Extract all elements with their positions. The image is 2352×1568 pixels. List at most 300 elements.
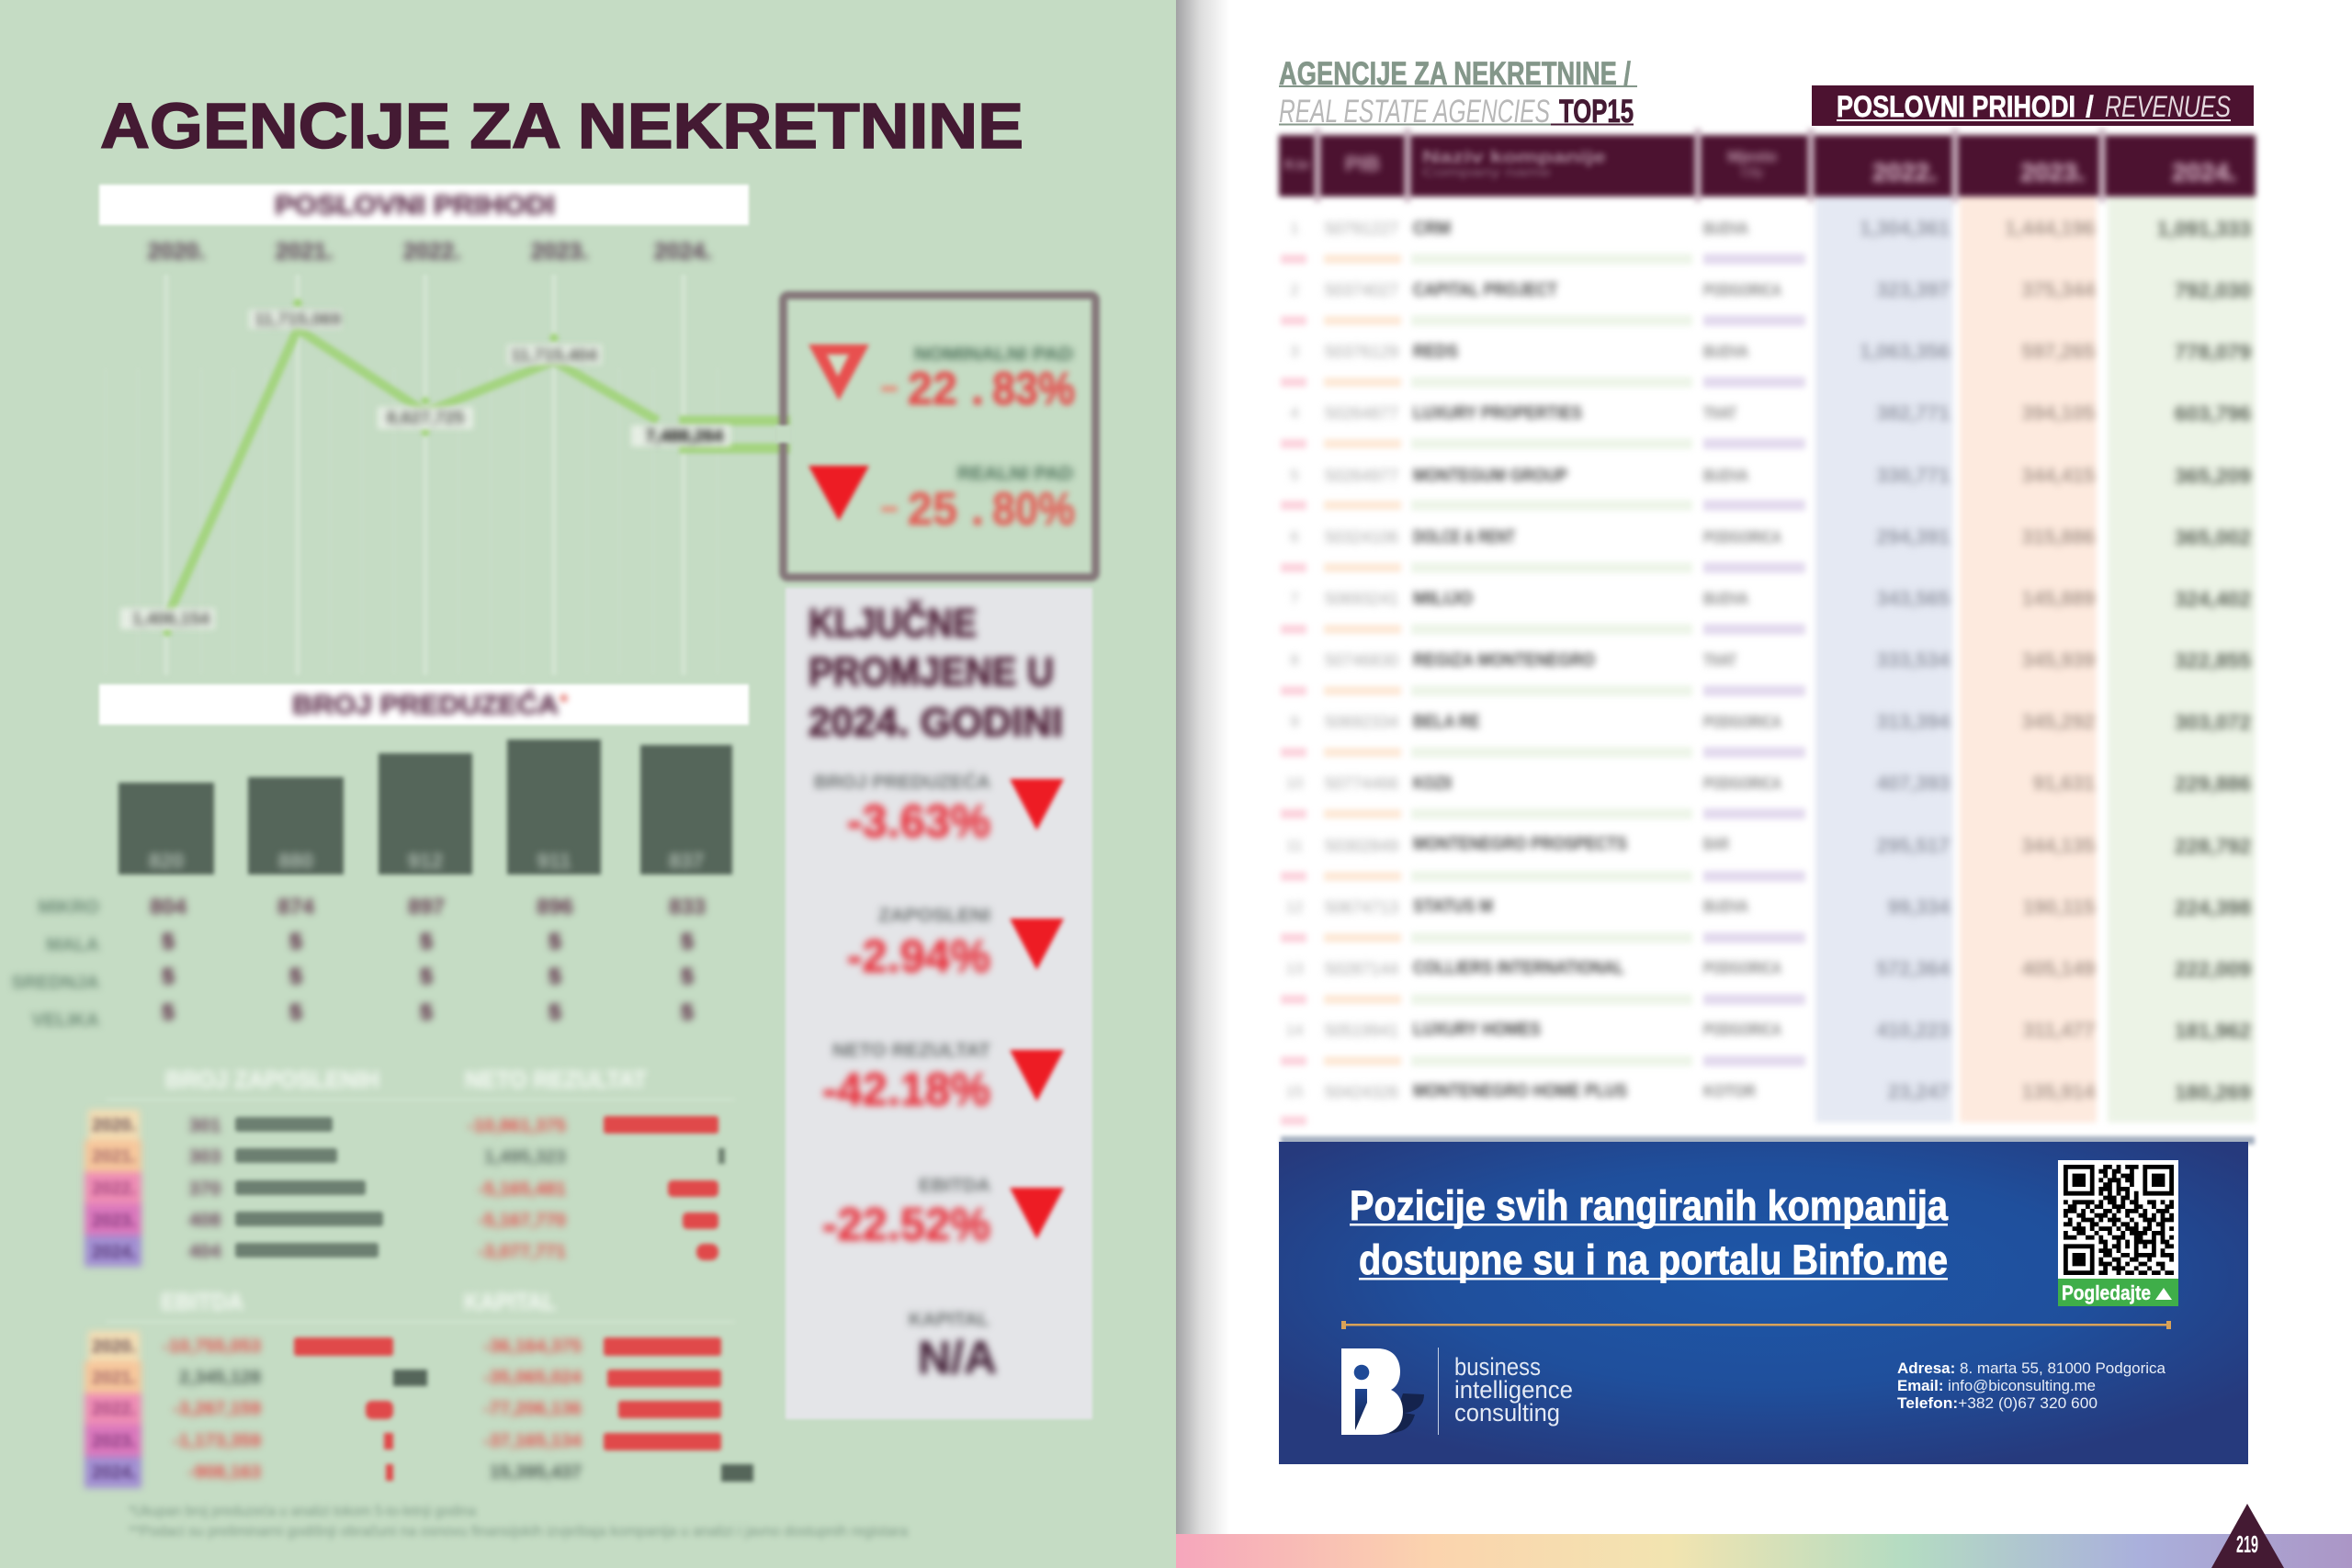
row 6: 365,002 — [2175, 525, 2251, 549]
row 12: BUDVA — [1703, 897, 1748, 916]
footnotes — [129, 1504, 908, 1540]
row 7: 145,889 — [2021, 587, 2095, 610]
row 10: 407,393 — [1876, 772, 1950, 795]
row 14: PODGORICA — [1703, 1021, 1781, 1039]
row 11 — [1286, 834, 2251, 858]
tab label: revenues: REVENUES — [2105, 90, 2231, 123]
row 7: 50693241 — [1325, 590, 1398, 608]
year axis labels: 2021. — [276, 239, 333, 265]
row 14 — [1286, 1019, 2251, 1043]
size category values: 5 — [162, 1000, 175, 1025]
ad headline — [1350, 1182, 1949, 1283]
ebitda bars: 2,345,128 — [179, 1368, 261, 1388]
row 7: MILIJO — [1413, 589, 1473, 609]
row 11: 295,517 — [1876, 834, 1950, 857]
row 5: 344,415 — [2021, 464, 2095, 487]
size category values: 5 — [420, 964, 433, 989]
net result bars — [468, 1116, 725, 1262]
row 4: TIVAT — [1703, 404, 1736, 423]
year axis labels: 2023. — [531, 239, 588, 265]
section headings: KAPITAL — [464, 1288, 556, 1315]
heading: ključne promjene: PROMJENE U — [808, 649, 1054, 694]
row 1: 50791227 — [1325, 220, 1398, 238]
size category values: 5 — [548, 930, 561, 954]
chart grid lines — [106, 275, 718, 675]
row 1: BUDVA — [1703, 220, 1748, 238]
section headings: EBITDA — [161, 1288, 243, 1315]
bar chart: companies per year: 911 — [537, 849, 571, 873]
row 8: 345,939 — [2021, 649, 2095, 671]
row 2: CAPITAL PROJECT — [1413, 280, 1557, 300]
page gutter shadow — [1176, 0, 1229, 1534]
size category values: 896 — [537, 895, 573, 919]
year badges: 2020. — [92, 1337, 136, 1357]
panel: key changes in 2024 — [786, 588, 1092, 1419]
row 2: PODGORICA — [1703, 281, 1781, 299]
tab slash: / — [2086, 90, 2094, 123]
metric: ebitda — [822, 1176, 990, 1250]
size category values: 5 — [548, 1000, 561, 1025]
row 3 — [1290, 340, 2251, 364]
size category labels: MIKRO — [38, 897, 99, 918]
capital bars: -35,065,024 — [483, 1368, 582, 1388]
row 1: 1,444,196 — [2005, 217, 2095, 240]
metric: kapital — [909, 1310, 997, 1383]
capital bars: -37,165,134 — [483, 1431, 582, 1451]
metric: neto rezultat — [822, 1041, 990, 1115]
row 6: PODGORICA — [1703, 528, 1781, 547]
row 8 — [1290, 649, 2251, 672]
row 15: 135,914 — [2021, 1080, 2096, 1103]
label: realni pad: REALNI PAD — [957, 464, 1073, 484]
value: real change: 25 — [908, 483, 957, 535]
bar chart: companies per year: 880 — [278, 849, 313, 873]
size category values: 804 — [150, 895, 187, 919]
subheading: top 15: TOP15 — [1559, 94, 1634, 130]
row 15: 180,269 — [2175, 1080, 2251, 1104]
row 11: 228,792 — [2175, 834, 2251, 858]
row 12 — [1286, 896, 2251, 919]
row 8: 8 — [1290, 651, 1299, 669]
logo wordmark — [1454, 1353, 1573, 1427]
year badges: 2021. — [92, 1147, 136, 1167]
employees bars: 301 — [188, 1115, 221, 1136]
row 4: 382,771 — [1876, 401, 1950, 424]
contact details: Email: info@biconsulting.me — [1897, 1377, 2096, 1394]
table: header row: PIB — [1345, 152, 1380, 175]
row 5: 365,209 — [2175, 464, 2251, 488]
year badges — [85, 1110, 141, 1267]
row 14: 311,477 — [2023, 1019, 2095, 1042]
size category labels: SREDNJA — [11, 973, 99, 993]
heading: ključne promjene: 2024. GODINI — [808, 700, 1063, 745]
row 7: 324,402 — [2175, 587, 2251, 611]
row 13: 405,149 — [2021, 957, 2095, 980]
panel: revenue line chart — [99, 185, 790, 675]
row 10: 10 — [1286, 774, 1303, 792]
value: nominal change — [880, 363, 1075, 414]
row 11: 11 — [1286, 837, 1303, 854]
size category values: 5 — [681, 964, 694, 989]
year axis labels — [148, 239, 711, 265]
page number marker — [2211, 1504, 2284, 1568]
heading banner: poslovni prihodi — [99, 185, 749, 225]
icon: down arrow — [1010, 919, 1064, 970]
row 10: 91,631 — [2033, 772, 2095, 795]
section headings: BROJ ZAPOSLENIH — [165, 1066, 379, 1093]
row 4: 394,105 — [2021, 401, 2095, 424]
panel: employees and net result — [85, 1066, 735, 1267]
row 1: 1,304,361 — [1860, 217, 1950, 240]
row 1: 1 — [1290, 220, 1299, 237]
row 5: 5 — [1290, 467, 1299, 484]
row 7: BUDVA — [1703, 590, 1748, 608]
section headings — [161, 1288, 556, 1315]
year badges: 2023. — [92, 1432, 136, 1451]
chart data labels: 7,488,264 — [646, 427, 724, 446]
value: real change: . — [971, 483, 984, 535]
row 13: 572,364 — [1876, 957, 1951, 980]
row 8: 333,534 — [1876, 649, 1951, 671]
metric: broj preduzeća — [814, 771, 990, 847]
bar chart: companies per year: 820 — [149, 849, 184, 873]
row 12: 190,115 — [2023, 896, 2095, 919]
chart data labels: 8,627,725 — [387, 409, 465, 428]
row 3: 1,063,356 — [1860, 340, 1950, 363]
year badges: 2023. — [92, 1212, 136, 1231]
row 3: 597,265 — [2021, 340, 2095, 363]
capital bars: -77,206,136 — [483, 1399, 582, 1419]
row 15: 23,247 — [1888, 1080, 1950, 1103]
section heading rule — [106, 1099, 735, 1100]
row 4 — [1290, 401, 2251, 425]
bar chart: companies per year: 837 — [669, 849, 704, 873]
row 3: BUDVA — [1703, 343, 1748, 361]
row 14: LUXURY HOMES — [1413, 1020, 1541, 1040]
row 10: KOZII — [1413, 773, 1452, 794]
year badges — [85, 1331, 141, 1488]
orange divider — [1341, 1321, 2171, 1329]
box outline — [783, 296, 1095, 577]
QR call to action: Pogledajte — [2062, 1281, 2151, 1304]
size category labels — [11, 897, 99, 1031]
section heading rule — [106, 1321, 735, 1323]
year axis labels: 2024. — [654, 239, 711, 265]
row 10: PODGORICA — [1703, 774, 1781, 793]
table: row separators — [1281, 259, 1805, 1121]
icon: outlined down triangle — [808, 344, 869, 400]
size category values: 5 — [420, 1000, 433, 1025]
row 6: 6 — [1290, 528, 1299, 546]
row 8: TIVAT — [1703, 651, 1736, 670]
row 13: 13 — [1286, 960, 1303, 977]
row 12: STATUS M — [1413, 897, 1493, 917]
row 5: 330,771 — [1876, 464, 1950, 487]
row 11: 344,135 — [2021, 834, 2095, 857]
contact details: Telefon:+382 (0)67 320 600 — [1897, 1394, 2098, 1412]
row 4: LUXURY PROPERTIES — [1413, 403, 1582, 423]
metric: ebitda: -22.52% — [822, 1199, 990, 1250]
row 9: 9 — [1290, 713, 1299, 730]
heading banner: broj preduzeća: * — [560, 690, 569, 715]
panel: ebitda and capital — [85, 1288, 753, 1488]
row 11: BAR — [1703, 835, 1729, 853]
bottom gradient strip — [1176, 1534, 2352, 1568]
label: nominalni pad: NOMINALNI PAD — [914, 344, 1073, 365]
size category values: 897 — [408, 895, 445, 919]
row 15: MONTENEGRO HOME PLUS — [1413, 1081, 1627, 1101]
year badges: 2022. — [92, 1400, 136, 1419]
row 8: 50746830 — [1325, 651, 1398, 670]
box opening for chart lines — [775, 425, 792, 443]
value: nominal change: 83% — [992, 363, 1075, 414]
table: header row: City — [1741, 164, 1763, 179]
logo wordmark: consulting — [1454, 1399, 1560, 1427]
table: header row: Company name — [1422, 164, 1551, 179]
row 6 — [1290, 525, 2251, 549]
chart data points — [163, 299, 559, 637]
row 3: 3 — [1290, 343, 1299, 360]
size category values: 874 — [277, 895, 315, 919]
employees bars: 408 — [188, 1210, 221, 1231]
row 14: 410,223 — [1876, 1019, 1950, 1042]
left page background — [0, 0, 1176, 1568]
row 9: 50692334 — [1325, 713, 1398, 731]
row 15: KOTOR — [1703, 1082, 1756, 1100]
metric: broj preduzeća: -3.63% — [847, 795, 990, 847]
panel: revenue change box — [775, 296, 1095, 577]
heading: ključne promjene — [808, 599, 1063, 745]
row 7: 343,565 — [1876, 587, 1950, 610]
year badges: 2022. — [92, 1179, 136, 1199]
ebitda bars: -1,173,359 — [173, 1431, 261, 1451]
chart data labels: 11,715,069 — [254, 310, 341, 330]
footnotes: *Ukupan broj preduzeća u analizi tokom 5-to-letnji godina — [129, 1504, 476, 1519]
row 11: MONTENEGRO PROSPECTS — [1413, 834, 1627, 854]
tab underline — [1837, 119, 2231, 121]
page number marker: 219 — [2236, 1530, 2258, 1558]
net result bars: -10,861,375 — [468, 1116, 566, 1136]
row 5: BUDVA — [1703, 467, 1748, 485]
row 13: 50287144 — [1325, 960, 1398, 978]
metric: neto rezultat: -42.18% — [822, 1064, 990, 1115]
row 3: 778,079 — [2175, 340, 2251, 364]
bar chart: companies per year: 912 — [408, 849, 443, 873]
row 6: DOLCE & RENT — [1413, 527, 1515, 547]
value: real change: 80% — [992, 483, 1075, 535]
net result bars: -5,167,770 — [478, 1211, 566, 1231]
row 6: 294,391 — [1876, 525, 1950, 548]
table: header row — [1279, 129, 2256, 202]
year badges: 2024. — [92, 1463, 136, 1483]
bar chart: companies per year — [119, 739, 732, 874]
value: nominal change: . — [971, 363, 984, 414]
row 6: 315,886 — [2021, 525, 2095, 548]
row 3: REDS — [1413, 342, 1458, 362]
table: header row: 2022. — [1872, 158, 1937, 186]
row 7: 7 — [1290, 590, 1299, 607]
row 2: 375,344 — [2021, 278, 2096, 301]
chart data labels: 11,715,404 — [511, 346, 597, 366]
employees bars: 370 — [188, 1179, 221, 1200]
year axis labels: 2020. — [148, 239, 205, 265]
row 12: 224,398 — [2175, 896, 2251, 919]
metric: kapital: N/A — [918, 1332, 997, 1383]
right page background — [1176, 0, 2352, 1568]
size category values: 5 — [289, 1000, 302, 1025]
size category values: 5 — [420, 930, 433, 954]
row 14: 181,962 — [2175, 1019, 2251, 1043]
metric: neto rezultat: NETO REZULTAT — [832, 1041, 990, 1061]
employees bars — [188, 1115, 383, 1262]
year badges: 2024. — [92, 1243, 136, 1262]
row 15: 50424326 — [1325, 1083, 1398, 1101]
row 1: CRM — [1413, 219, 1451, 239]
row 5 — [1290, 464, 2251, 488]
row 13: PODGORICA — [1703, 959, 1781, 977]
row 15: 15 — [1286, 1083, 1303, 1100]
panel: portal advertisement — [1279, 1142, 2248, 1464]
row 4: 4 — [1290, 404, 1299, 422]
heading banner: broj preduzeća — [99, 684, 749, 725]
row 13: COLLIERS INTERNATIONAL — [1413, 958, 1624, 978]
table: header row: Naziv kompanije — [1422, 148, 1606, 166]
row 11: 50302849 — [1325, 837, 1398, 855]
row 9: 313,394 — [1876, 710, 1951, 733]
row 9 — [1290, 710, 2251, 734]
capital bars — [483, 1337, 753, 1483]
value: real change — [880, 483, 1075, 535]
table: header row: Mjesto — [1727, 148, 1777, 165]
tab label: poslovni prihodi: POSLOVNI PRIHODI — [1837, 90, 2075, 123]
capital bars: -36,164,375 — [483, 1337, 582, 1357]
heading banner: poslovni prihodi: POSLOVNI PRIHODI — [275, 191, 555, 220]
row 8: REGIZA MONTENEGRO — [1413, 650, 1595, 671]
table: column tints — [1815, 193, 2256, 1122]
table bottom shadow — [1281, 1136, 2255, 1145]
row 13 — [1286, 957, 2251, 981]
row 4: 50264877 — [1325, 404, 1398, 423]
row 12: 99,334 — [1888, 896, 1951, 919]
row 6: 50324106 — [1325, 528, 1398, 547]
row 2: 792,030 — [2175, 278, 2251, 302]
chart data labels: 1,406,154 — [132, 610, 210, 629]
net result bars: 1,495,323 — [484, 1147, 566, 1168]
ad headline: dostupne su i na portalu Binfo.me — [1359, 1236, 1948, 1283]
panel background — [786, 588, 1092, 1419]
subheading: english sector name: REAL ESTATE AGENCIES — [1279, 94, 1550, 130]
size category values: 833 — [669, 895, 706, 919]
metric: zaposleni — [847, 906, 990, 982]
row 13: 222,009 — [2175, 957, 2251, 981]
row 3: 50376129 — [1325, 343, 1398, 361]
revenues section tab — [1812, 85, 2254, 126]
heading banner: broj preduzeća: BROJ PREDUZEĆA — [292, 689, 559, 720]
row 2: 50374027 — [1325, 281, 1398, 299]
table: header row: R.br — [1284, 157, 1311, 172]
table: ranking rows — [1286, 217, 2251, 1104]
icon: down arrow — [1010, 1188, 1064, 1239]
metric: zaposleni: -2.94% — [847, 931, 990, 982]
size category values: 5 — [681, 930, 694, 954]
metric: ebitda: EBITDA — [919, 1176, 990, 1196]
row 5: MONTEGUM GROUP — [1413, 466, 1567, 486]
metric: kapital: KAPITAL — [909, 1310, 989, 1330]
value: nominal change: 22 — [908, 363, 957, 414]
title: AGENCIJE ZA NEKRETNINE — [100, 90, 1023, 162]
value: real change: − — [880, 483, 899, 535]
metric: zaposleni: ZAPOSLENI — [878, 906, 990, 926]
row 1 — [1290, 217, 2251, 241]
logo wordmark: business — [1454, 1353, 1541, 1381]
year badges: 2020. — [92, 1116, 136, 1135]
chart data labels — [120, 310, 730, 629]
section headings: NETO REZULTAT — [465, 1066, 647, 1093]
net result bars: -5,165,481 — [478, 1179, 566, 1200]
row 9: 303,072 — [2175, 710, 2251, 734]
size category values: 5 — [289, 930, 302, 954]
capital bars: 15,395,437 — [490, 1462, 582, 1483]
ad headline: Pozicije svih rangiranih kompanija — [1350, 1182, 1949, 1229]
size category values: 5 — [162, 930, 175, 954]
row 1: 1,091,333 — [2157, 217, 2251, 241]
value: nominal change: − — [880, 363, 899, 414]
heading underline — [1279, 85, 1637, 87]
row 15 — [1286, 1080, 2251, 1104]
metric: broj preduzeća: BROJ PREDUZEĆA — [814, 771, 990, 793]
panel: number of companies — [11, 684, 749, 1031]
row 2: 323,397 — [1876, 278, 1950, 301]
row 12: 50674713 — [1325, 898, 1398, 917]
row 9: PODGORICA — [1703, 713, 1781, 731]
subheading underline — [1279, 123, 1551, 125]
year axis labels: 2022. — [403, 239, 460, 265]
row 9: 345,292 — [2021, 710, 2095, 733]
employees bars: 404 — [188, 1241, 221, 1262]
size category labels: MALA — [46, 935, 99, 955]
row 5: 50264977 — [1325, 467, 1398, 485]
icon: down arrow — [1010, 779, 1064, 830]
icon: down arrow — [1010, 1050, 1064, 1101]
contact details — [1897, 1359, 2166, 1412]
row 2 — [1290, 278, 2251, 302]
row 10 — [1286, 772, 2251, 795]
row 4: 603,796 — [2175, 401, 2251, 425]
employees bars: 303 — [188, 1146, 221, 1168]
ebitda bars — [163, 1337, 427, 1483]
section headings — [165, 1066, 647, 1093]
ebitda bars: -908,163 — [188, 1462, 261, 1483]
table: header row: 2024. — [2172, 158, 2236, 186]
footnotes: **Podaci su preliminarni godišnji obračuni na osnovu finansijskih izvještaja kompanija u analizi i javno dostupnih registara — [129, 1524, 908, 1540]
logo wordmark: intelligence — [1454, 1376, 1573, 1404]
size category values: 5 — [681, 1000, 694, 1025]
net result bars: -3,077,771 — [478, 1242, 566, 1262]
size category values: 5 — [162, 964, 175, 989]
row 12: 12 — [1286, 898, 1303, 916]
ad background — [1279, 1142, 2248, 1464]
ebitda bars: -3,267,159 — [173, 1399, 261, 1419]
logo: business intelligence consulting mark — [1341, 1348, 1424, 1435]
size category values — [150, 895, 706, 1025]
row 8: 322,855 — [2175, 649, 2251, 672]
row 2: 2 — [1290, 281, 1299, 299]
heading: sector name: AGENCIJE ZA NEKRETNINE / — [1279, 56, 1631, 92]
row 9: BELA RE — [1413, 712, 1480, 732]
row 14: 50519941 — [1325, 1021, 1398, 1040]
subheading underline accent — [1551, 123, 1634, 125]
year badges: 2021. — [92, 1369, 136, 1388]
